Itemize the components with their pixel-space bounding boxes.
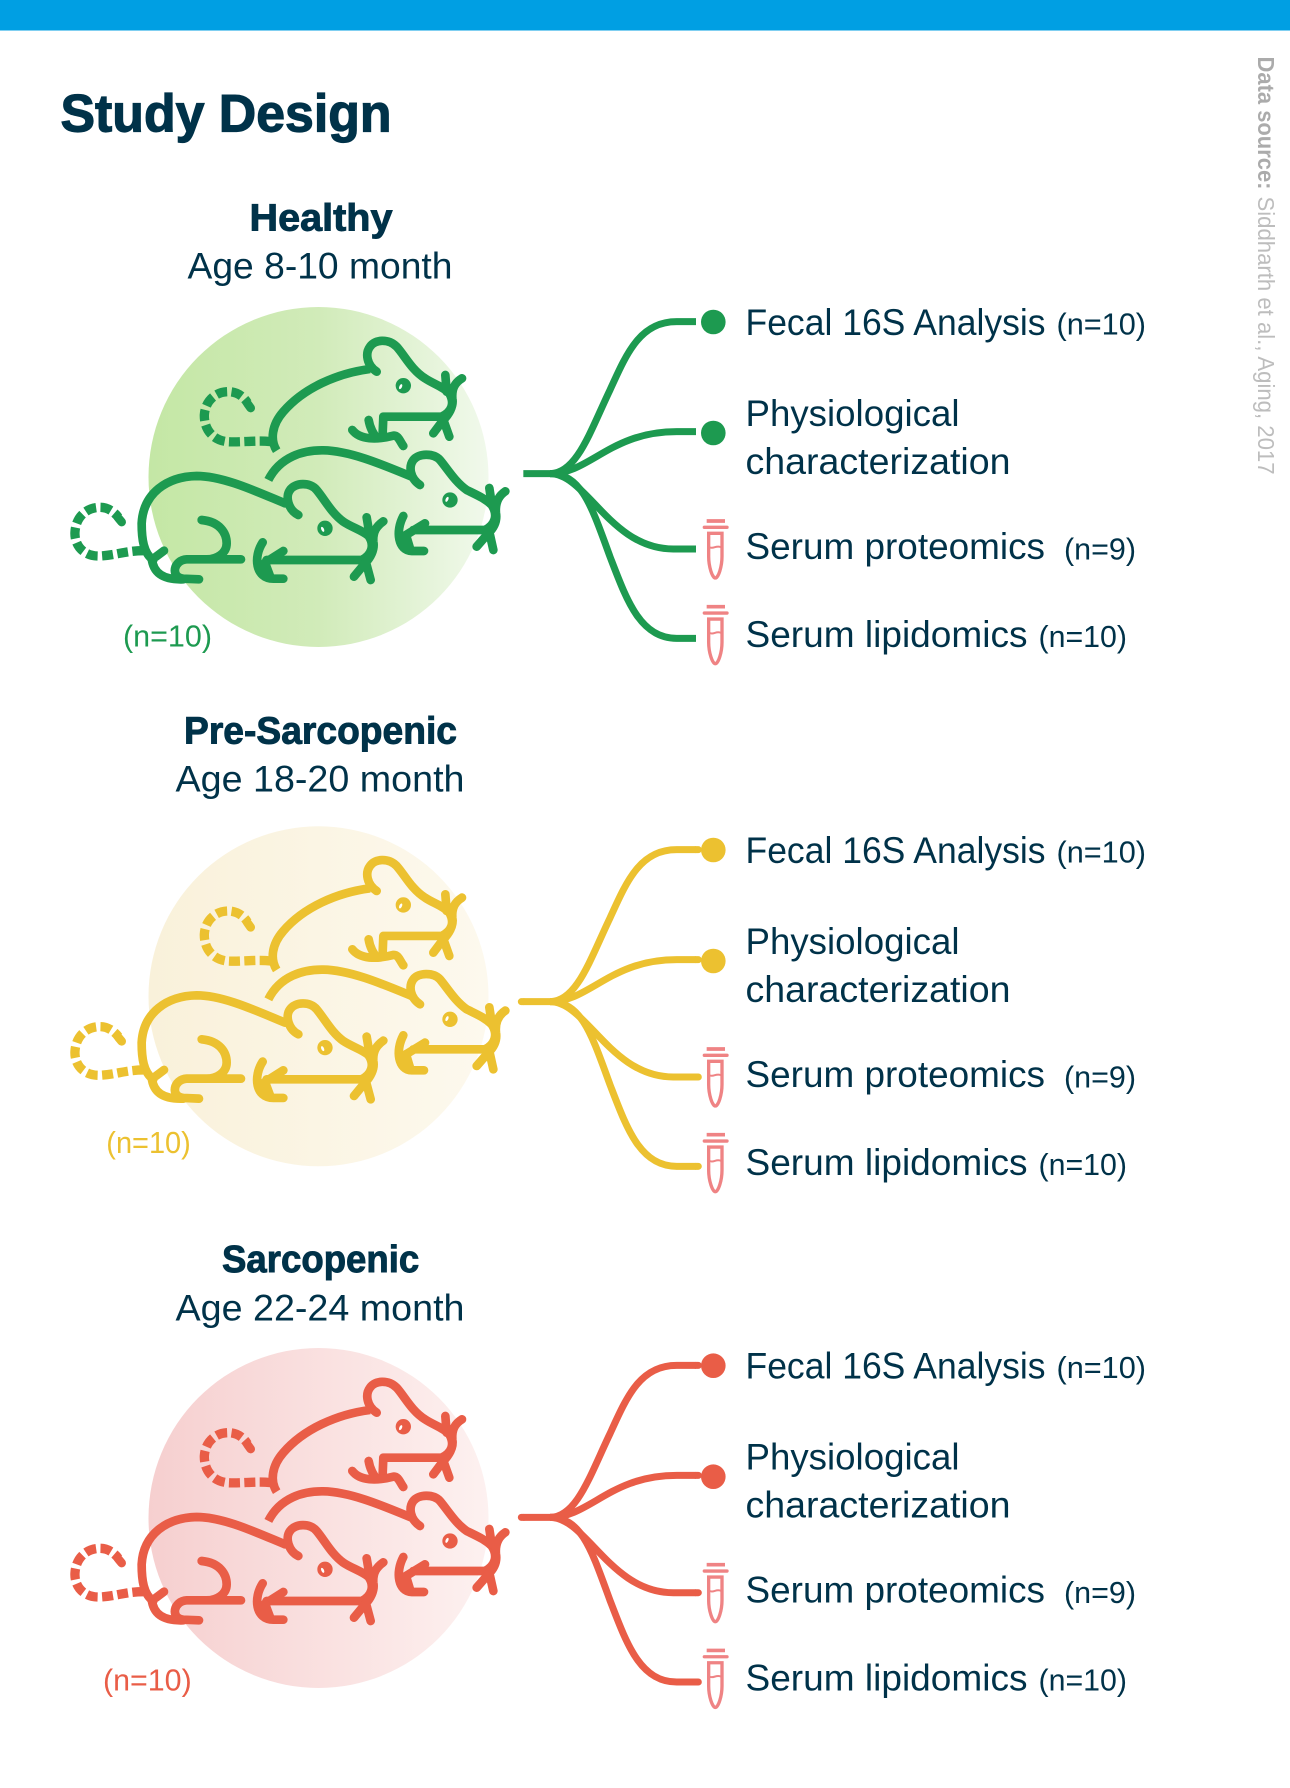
background circle: sarcopenic bbox=[148, 1348, 488, 1688]
label: lipidomics: Serum lipidomics bbox=[746, 614, 1028, 655]
age: healthy: Age 8-10 month bbox=[188, 246, 452, 286]
background circle: pre-sarcopenic bbox=[148, 826, 488, 1166]
icon: tube proteomics bbox=[704, 1049, 727, 1106]
n: fecal: (n=10) bbox=[1056, 306, 1146, 342]
icon: tube lipidomics bbox=[704, 1135, 727, 1192]
title: Study Design bbox=[60, 84, 392, 144]
icon: tube lipidomics bbox=[704, 1650, 727, 1707]
icon: yellow mice bbox=[75, 860, 505, 1099]
panel: healthy bbox=[75, 198, 1146, 664]
sample size: healthy mice: (n=10) bbox=[123, 618, 212, 654]
n: fecal: (n=10) bbox=[1056, 834, 1146, 870]
label: proteomics: Serum proteomics bbox=[746, 1054, 1045, 1095]
icon: tube proteomics bbox=[704, 1565, 727, 1622]
branching lines: sarcopenic bbox=[521, 1365, 698, 1682]
label: physiological: Physiological bbox=[746, 1437, 960, 1478]
n: lipidomics: (n=10) bbox=[1038, 1663, 1127, 1698]
data source credit: Siddharth et al., Aging, 2017 bbox=[1253, 196, 1279, 474]
panel: pre-sarcopenic bbox=[75, 710, 1146, 1192]
background circle: healthy bbox=[148, 307, 488, 647]
data source credit bbox=[1253, 56, 1279, 474]
icon: tube lipidomics bbox=[704, 607, 727, 664]
label: fecal: Fecal 16S Analysis bbox=[746, 302, 1046, 343]
data source credit: Data source: bbox=[1253, 56, 1279, 190]
label: lipidomics: Serum lipidomics bbox=[746, 1142, 1028, 1183]
n: proteomics: (n=9) bbox=[1064, 1060, 1136, 1094]
icon: dot fecal bbox=[701, 838, 726, 862]
n: lipidomics: (n=10) bbox=[1038, 1147, 1127, 1182]
age: pre-sarcopenic: Age 18-20 month bbox=[176, 758, 464, 800]
panel: sarcopenic bbox=[75, 1239, 1146, 1707]
label: lipidomics: Serum lipidomics bbox=[746, 1658, 1028, 1699]
heading: sarcopenic: Sarcopenic bbox=[222, 1239, 419, 1281]
label: characterization: characterization bbox=[746, 441, 1010, 482]
icon: dot fecal bbox=[701, 310, 726, 334]
icon: dot physiological bbox=[701, 421, 726, 445]
icon: dot physiological bbox=[701, 1464, 726, 1489]
icon: red mice bbox=[75, 1382, 505, 1621]
icon: green mice bbox=[75, 341, 505, 580]
top bar bbox=[0, 0, 1290, 30]
icon: tube proteomics bbox=[704, 521, 727, 578]
icon: dot fecal bbox=[701, 1353, 726, 1378]
age: sarcopenic: Age 22-24 month bbox=[176, 1288, 464, 1328]
n: proteomics: (n=9) bbox=[1064, 532, 1136, 566]
label: fecal: Fecal 16S Analysis bbox=[746, 830, 1046, 871]
branching lines: healthy bbox=[523, 322, 696, 638]
icon: dot physiological bbox=[701, 949, 726, 973]
label: proteomics: Serum proteomics bbox=[746, 526, 1045, 567]
n: fecal: (n=10) bbox=[1056, 1350, 1146, 1385]
label: physiological: Physiological bbox=[746, 393, 960, 434]
branching lines: pre-sarcopenic bbox=[521, 850, 698, 1166]
label: physiological: Physiological bbox=[746, 921, 960, 962]
label: characterization: characterization bbox=[746, 1485, 1010, 1526]
label: fecal: Fecal 16S Analysis bbox=[746, 1346, 1046, 1387]
sample size: sarcopenic mice: (n=10) bbox=[103, 1662, 192, 1698]
heading: healthy: Healthy bbox=[250, 198, 392, 240]
label: characterization: characterization bbox=[746, 969, 1010, 1010]
label: proteomics: Serum proteomics bbox=[746, 1570, 1045, 1611]
sample size: pre-sarcopenic mice: (n=10) bbox=[106, 1125, 191, 1160]
heading: pre-sarcopenic: Pre-Sarcopenic bbox=[184, 710, 457, 752]
n: lipidomics: (n=10) bbox=[1038, 619, 1127, 654]
n: proteomics: (n=9) bbox=[1064, 1575, 1136, 1610]
